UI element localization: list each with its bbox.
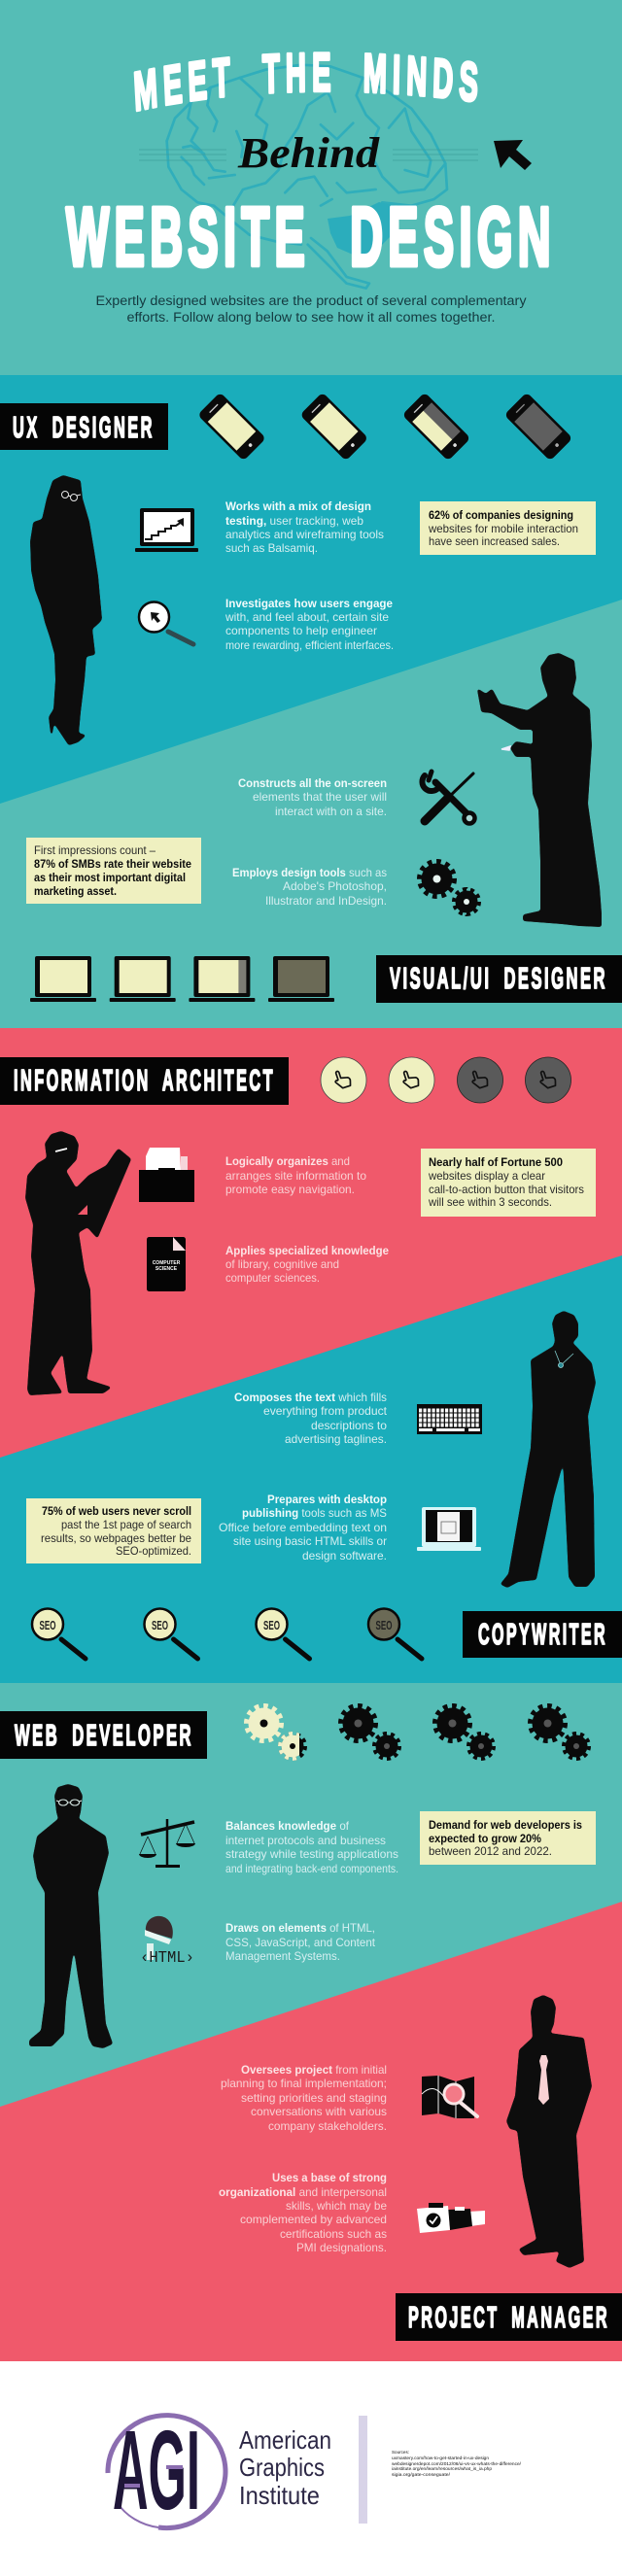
panel: UX designer bbox=[0, 393, 596, 744]
text: prepares bbox=[219, 1493, 387, 1563]
icon: computer science book bbox=[147, 1237, 186, 1291]
text: sources: uxmastery.com/how-to-get-started-in-ux-design bbox=[392, 2456, 489, 2460]
text: uses a base bbox=[219, 2171, 387, 2254]
silhouette: project manager man bbox=[507, 1996, 591, 2267]
text: investigates: with, and feel about, certain site bbox=[225, 610, 389, 624]
icon: computer science book: SCIENCE bbox=[156, 1266, 178, 1272]
text: prepares: site using basic HTML skills or bbox=[233, 1534, 387, 1548]
text: sources: iainstitute.org/en/learn/resources/what_is_ia.php bbox=[392, 2466, 492, 2471]
callout: 75 percent: 75% of web users never scroll bbox=[42, 1504, 191, 1518]
silhouette: web developer man bbox=[30, 1785, 112, 2047]
callout: demand for web developers: expected to grow 20% bbox=[429, 1832, 541, 1845]
text: uses a base: PMI designations. bbox=[296, 2241, 387, 2254]
icon: gears bbox=[420, 861, 479, 914]
text: composes bbox=[234, 1391, 388, 1446]
logo: American Graphics Institute: Institute bbox=[239, 2481, 320, 2510]
text: logically organizes bbox=[225, 1154, 366, 1196]
icon: file folder bbox=[139, 1148, 194, 1202]
text: balances knowledge: strategy while testing applications bbox=[225, 1847, 398, 1861]
text: applies knowledge bbox=[225, 1244, 389, 1285]
text: composes: everything from product bbox=[263, 1404, 388, 1418]
text: applies knowledge: computer sciences. bbox=[225, 1271, 320, 1285]
callout: first impressions: 87% of SMBs rate their website bbox=[34, 857, 191, 871]
text: prepares: Office before embedding text on bbox=[219, 1521, 387, 1534]
text: oversees project: setting priorities and staging bbox=[241, 2091, 387, 2105]
text: composes: descriptions to bbox=[311, 1419, 387, 1432]
callout: first impressions: First impressions count – bbox=[34, 843, 156, 857]
text: constructs: Constructs all the on-screen bbox=[238, 776, 387, 790]
text: prepares: Prepares with desktop bbox=[267, 1493, 387, 1506]
callout: 62 percent: websites for mobile interaction bbox=[428, 522, 578, 535]
text: works with a mix: Works with a mix of design bbox=[225, 499, 371, 513]
text: constructs bbox=[238, 776, 387, 818]
text: employs: Illustrator and InDesign. bbox=[265, 894, 387, 908]
icon: white laptop with page bbox=[417, 1507, 481, 1551]
callout: Fortune 500: websites display a clear bbox=[428, 1169, 545, 1183]
panel: header bbox=[64, 52, 556, 325]
heading: Information Architect bbox=[0, 1057, 289, 1105]
callout: Fortune 500 bbox=[421, 1149, 596, 1217]
decorative script word: Behind: Behind bbox=[237, 129, 380, 177]
text: works with a mix bbox=[225, 499, 384, 555]
text: works with a mix: analytics and wireframing tools bbox=[225, 528, 384, 541]
text: balances knowledge: internet protocols and business bbox=[225, 1834, 386, 1847]
text: logically organizes: arranges site information to bbox=[225, 1169, 366, 1183]
callout: first impressions bbox=[26, 838, 201, 904]
decorative script word: Behind bbox=[139, 129, 478, 177]
icon: map with magnifier bbox=[422, 2076, 477, 2118]
text: uses a base: skills, which may be bbox=[286, 2199, 387, 2213]
icon row: phones bbox=[197, 393, 572, 461]
icon: computer science book: COMPUTER bbox=[153, 1260, 181, 1266]
panel: Web developer bbox=[0, 1706, 596, 2047]
callout: Fortune 500: Nearly half of Fortune 500 bbox=[429, 1155, 563, 1169]
text: sources: webdesignerdepot.com/2012/06/ui-vs-ux-whats-the-difference/ bbox=[392, 2461, 522, 2466]
icon: cursor arrow bbox=[494, 140, 532, 170]
silhouette: UX designer woman bbox=[31, 476, 101, 744]
text: balances knowledge bbox=[225, 1819, 398, 1875]
panel: footer bbox=[108, 2407, 522, 2533]
icon row: SEO magnifiers: SEO bbox=[152, 1618, 168, 1632]
text: investigates: components to help engineer bbox=[225, 624, 377, 637]
silhouette: visual designer man bbox=[478, 654, 601, 926]
text: investigates: more rewarding, efficient interfaces. bbox=[225, 638, 394, 652]
intro text: Expertly designed websites are the product of several complementary bbox=[95, 293, 527, 308]
icon: keyboard bbox=[417, 1404, 482, 1434]
intro text bbox=[95, 293, 527, 325]
heading: Copywriter bbox=[463, 1611, 622, 1658]
text: draws on elements: Draws on elements of HTML, bbox=[225, 1921, 375, 1935]
text: employs: Adobe's Photoshop, bbox=[283, 879, 387, 893]
silhouette: copywriter woman bbox=[501, 1312, 595, 1587]
text: composes: Composes the text which fills bbox=[234, 1391, 387, 1404]
icon: HTML lightbulb bbox=[140, 1916, 194, 1968]
callout: demand for web developers: Demand for web developers is bbox=[429, 1818, 582, 1832]
icon: magnifier with cursor bbox=[139, 602, 193, 644]
text: uses a base: certifications such as bbox=[280, 2227, 387, 2241]
text: works with a mix: testing, user tracking, web bbox=[225, 514, 363, 528]
icon row: SEO magnifiers bbox=[32, 1609, 422, 1659]
heading: UX Designer bbox=[0, 403, 168, 450]
text: oversees project: Oversees project from initial bbox=[241, 2063, 387, 2077]
text: uses a base: Uses a base of strong bbox=[272, 2171, 387, 2184]
text: works with a mix: such as Balsamiq. bbox=[225, 541, 318, 555]
icon row: SEO magnifiers: SEO bbox=[39, 1618, 56, 1632]
divider bar bbox=[359, 2416, 367, 2524]
callout: demand for web developers: between 2012 and 2022. bbox=[429, 1844, 552, 1858]
icon: HTML lightbulb: ‹HTML› bbox=[140, 1949, 194, 1968]
heading: UX Designer: UX DESIGNER bbox=[13, 410, 155, 444]
callout: 62 percent bbox=[420, 501, 596, 555]
panel: Visual/UI designer bbox=[26, 654, 622, 1003]
logo: American Graphics Institute: Graphics bbox=[239, 2453, 325, 2482]
callout: first impressions: as their most important digital bbox=[34, 871, 186, 884]
silhouette: information architect man bbox=[26, 1132, 130, 1394]
text: sources bbox=[392, 2450, 522, 2477]
callout: 75 percent bbox=[26, 1498, 201, 1563]
text: prepares: design software. bbox=[302, 1549, 387, 1563]
text: uses a base: organizational and interpersonal bbox=[219, 2185, 387, 2199]
callout: demand for web developers bbox=[420, 1811, 596, 1865]
panel: Project manager bbox=[219, 1996, 622, 2341]
text: constructs: interact with on a site. bbox=[275, 805, 387, 818]
text: draws on elements: CSS, JavaScript, and Content bbox=[225, 1936, 376, 1949]
callout: 75 percent: past the 1st page of search bbox=[61, 1518, 191, 1531]
text: composes: advertising taglines. bbox=[285, 1432, 387, 1446]
text: oversees project bbox=[221, 2063, 387, 2133]
icon row: laptops bbox=[30, 956, 334, 1002]
text: oversees project: conversations with various bbox=[251, 2105, 387, 2118]
panel: Information architect bbox=[0, 1057, 596, 1394]
callout: 62 percent: have seen increased sales. bbox=[429, 534, 560, 548]
callout: 62 percent: 62% of companies designing bbox=[429, 508, 573, 522]
heading: Information Architect: INFORMATION ARCHITECT bbox=[14, 1063, 275, 1097]
text: logically organizes: Logically organizes and bbox=[225, 1154, 350, 1168]
text: investigates: Investigates how users engage bbox=[225, 597, 393, 610]
callout: Fortune 500: call-to-action button that visitors bbox=[429, 1183, 584, 1196]
text: balances knowledge: and integrating back-end components. bbox=[225, 1862, 398, 1875]
text: sources: sigia.org/gate-conseguate/ bbox=[392, 2472, 451, 2477]
icon row: SEO magnifiers: SEO bbox=[375, 1618, 393, 1632]
text: prepares: publishing tools such as MS bbox=[242, 1506, 387, 1520]
heading: Visual/UI Designer bbox=[376, 955, 622, 1003]
icon: brain cerebellum bbox=[328, 202, 398, 260]
callout: first impressions: marketing asset. bbox=[34, 884, 117, 898]
text: logically organizes: promote easy navigation. bbox=[225, 1183, 355, 1196]
icon row: gear pairs bbox=[247, 1706, 589, 1759]
text: applies knowledge: Applies specialized knowledge bbox=[225, 1244, 389, 1257]
text: applies knowledge: of library, cognitive and bbox=[225, 1257, 339, 1271]
text: sources: Sources: bbox=[392, 2450, 409, 2455]
icon row: pointer circles bbox=[321, 1057, 571, 1103]
icon: laptop with chart bbox=[135, 508, 198, 552]
text: employs bbox=[232, 866, 387, 908]
icon: briefcases with check bbox=[417, 2203, 485, 2233]
intro text: efforts. Follow along below to see how it all comes together. bbox=[126, 310, 496, 325]
text: draws on elements: Management Systems. bbox=[225, 1949, 340, 1963]
callout: Fortune 500: will see within 3 seconds. bbox=[428, 1195, 552, 1209]
logo: American Graphics Institute: American bbox=[239, 2425, 331, 2455]
icon: balance scales bbox=[139, 1819, 195, 1868]
title line: Meet the Minds: MEET THE MINDS bbox=[134, 52, 478, 113]
callout: 75 percent: SEO-optimized. bbox=[116, 1544, 191, 1558]
text: constructs: elements that the user will bbox=[253, 790, 387, 804]
panel: Copywriter bbox=[26, 1312, 622, 1659]
icon: wrench and screwdriver bbox=[422, 772, 474, 824]
logo: American Graphics Institute: AGI bbox=[113, 2407, 200, 2533]
text: uses a base: complemented by advanced bbox=[240, 2213, 387, 2226]
callout: 75 percent: results, so webpages better be bbox=[41, 1531, 191, 1545]
text: oversees project: planning to final implementation; bbox=[221, 2077, 387, 2090]
heading: Web Developer bbox=[0, 1711, 207, 1759]
text: employs: Employs design tools such as bbox=[232, 866, 387, 879]
text: oversees project: company stakeholders. bbox=[268, 2119, 387, 2133]
icon: brain line drawing bbox=[167, 65, 447, 289]
heading: Project Manager bbox=[396, 2293, 622, 2341]
icon row: SEO magnifiers: SEO bbox=[263, 1618, 280, 1632]
text: draws on elements bbox=[225, 1921, 376, 1963]
heading: Web Developer: WEB DEVELOPER bbox=[15, 1718, 193, 1752]
text: balances knowledge: Balances knowledge of bbox=[225, 1819, 350, 1833]
text: investigates bbox=[225, 597, 394, 652]
